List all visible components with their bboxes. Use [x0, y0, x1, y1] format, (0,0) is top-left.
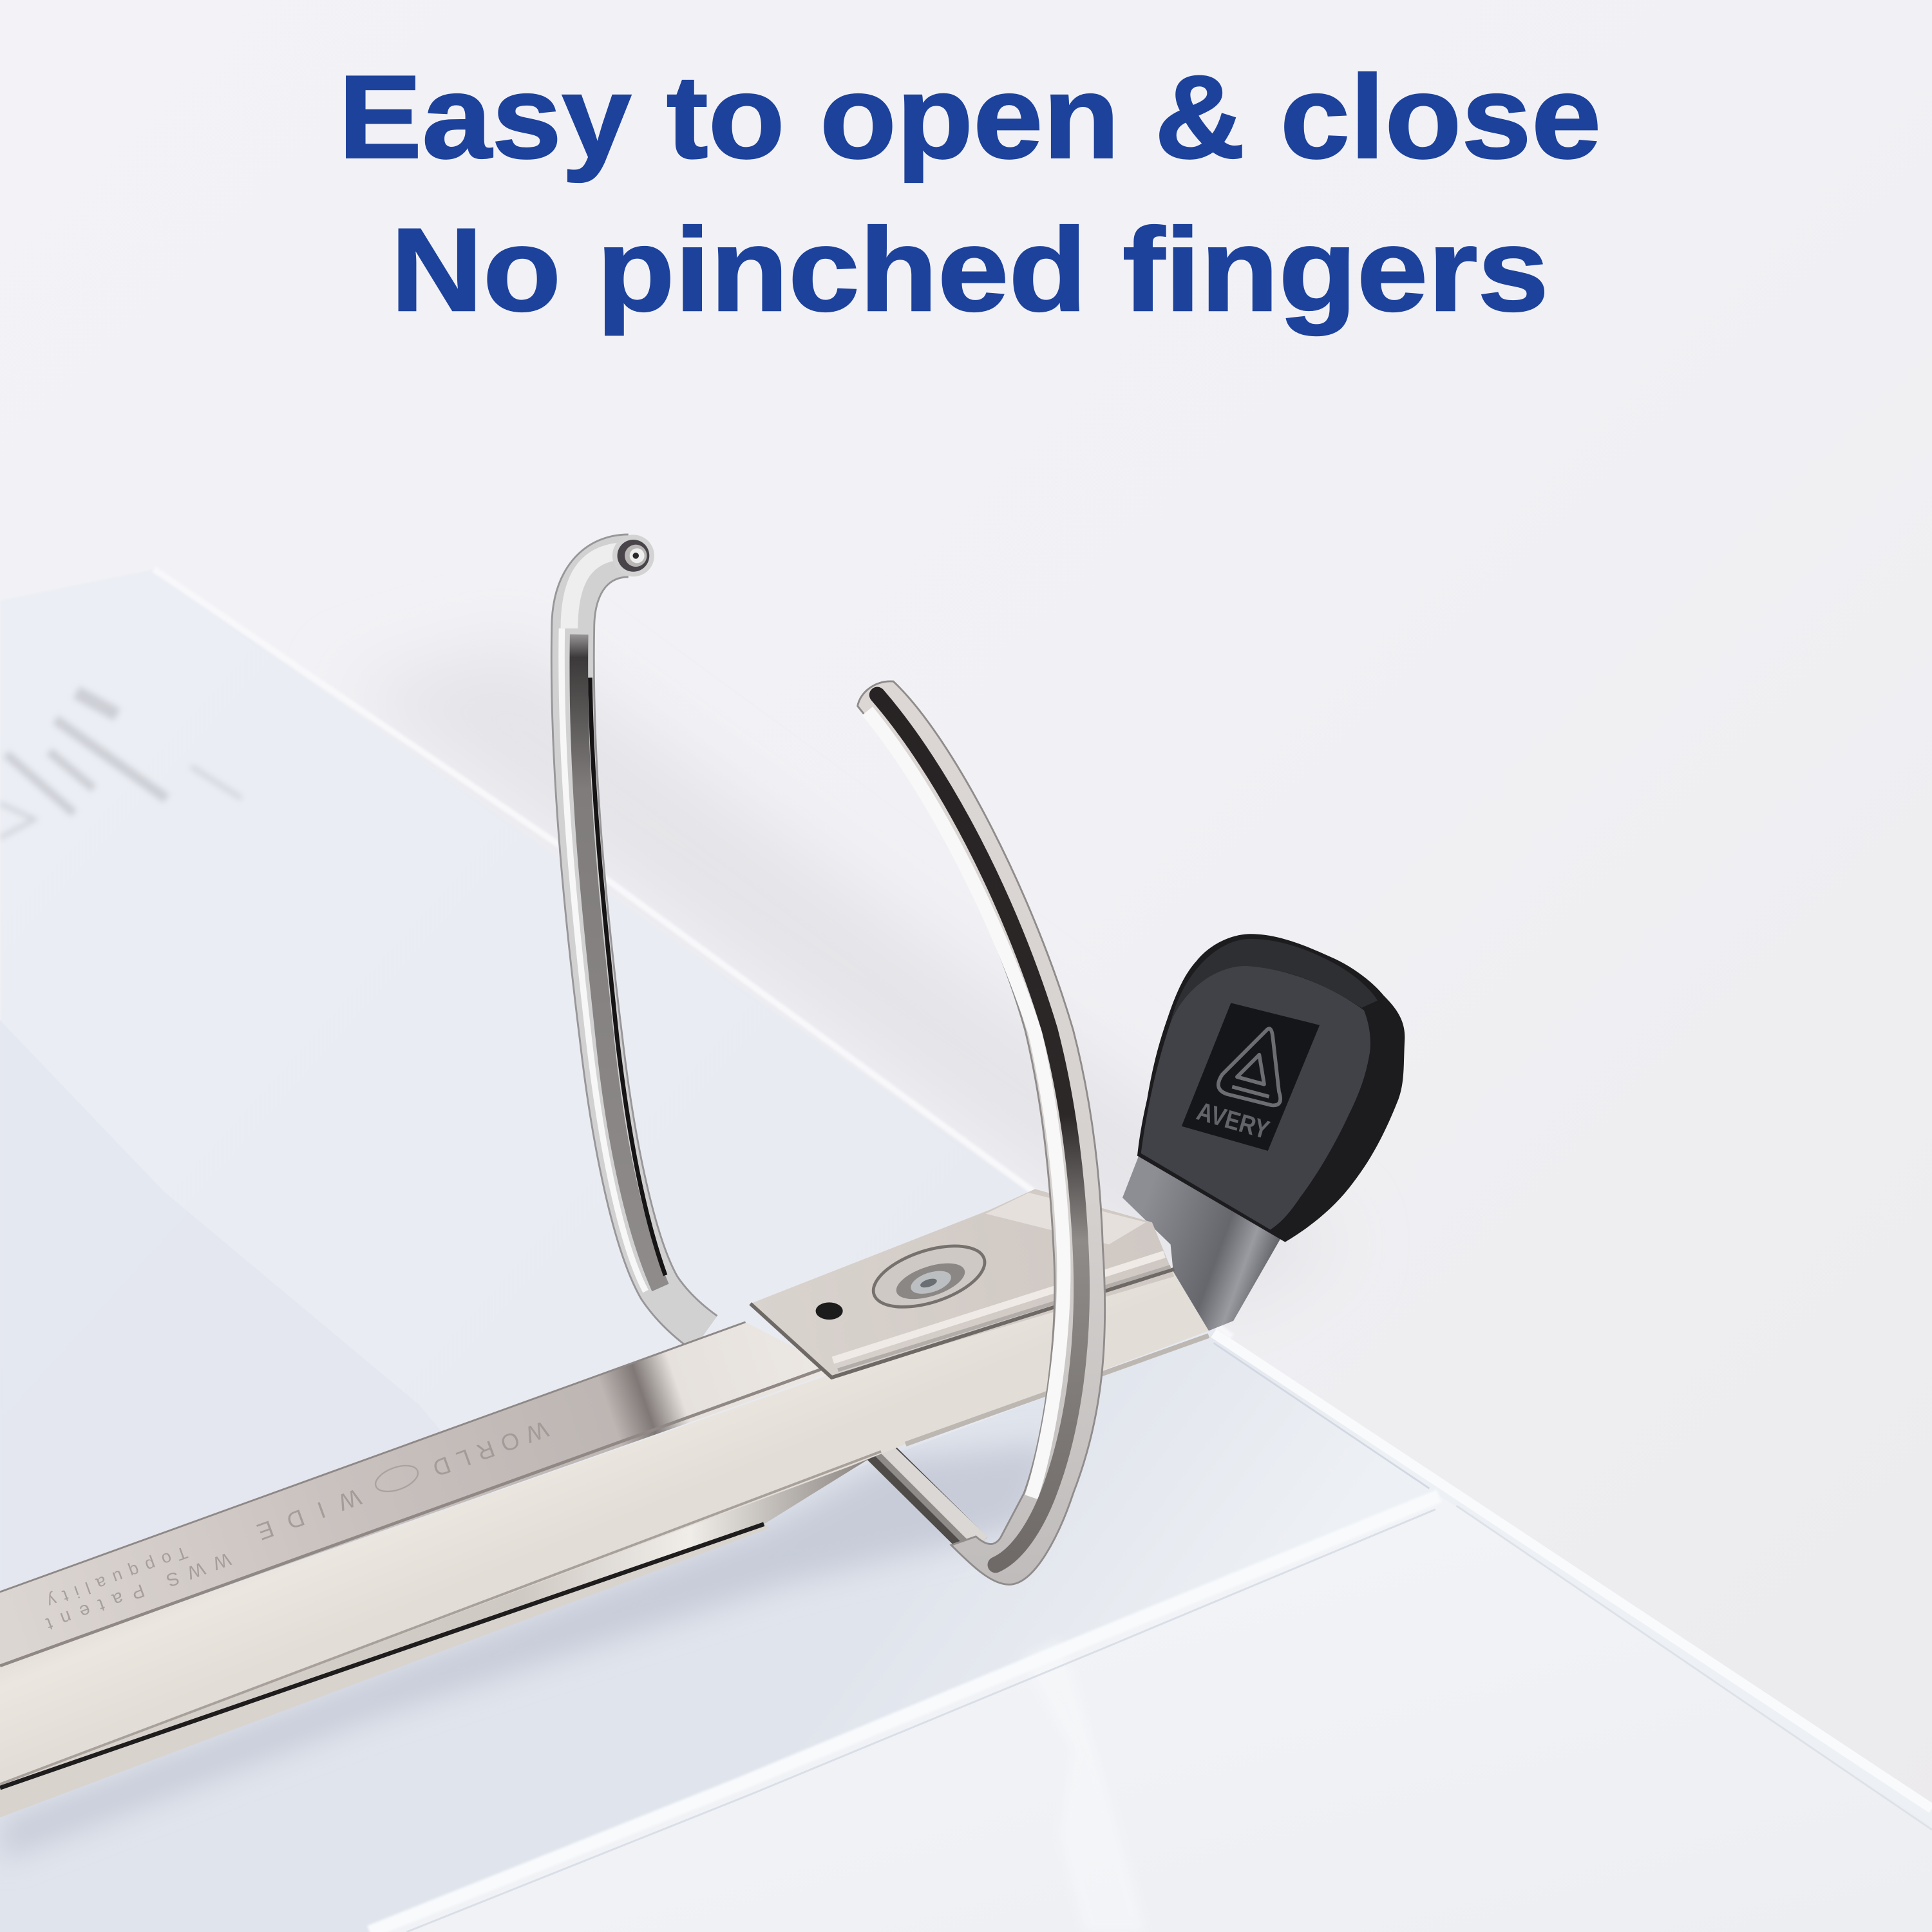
binder cover with clear pocket	[0, 1333, 1932, 1932]
title line 1: Easy to open & close	[338, 51, 1601, 183]
end plate	[750, 1189, 1174, 1378]
engraved text	[43, 1416, 552, 1634]
back ring	[562, 551, 705, 1333]
engraved text: WIDE	[254, 1484, 365, 1546]
engraved text: WORLD	[430, 1416, 552, 1482]
ring lower leg	[873, 1442, 982, 1548]
pocket area	[0, 1333, 1932, 1932]
engraved text: WWS Patent	[43, 1548, 234, 1634]
lower highlight band	[0, 1452, 881, 1788]
lever stem	[1122, 1153, 1282, 1331]
title line 2: No pinched fingers	[391, 204, 1549, 336]
rivet	[866, 1234, 992, 1319]
dark gap line	[0, 1524, 764, 1788]
top face	[0, 1322, 838, 1666]
metal mechanism bar	[0, 1189, 1209, 1817]
front face	[0, 1269, 1209, 1784]
engraved text: Topquality	[44, 1543, 190, 1611]
small hole	[816, 1302, 843, 1320]
shadow beneath metal mechanism	[0, 1442, 1059, 1861]
outer edge strip	[1214, 1333, 1932, 1809]
welded seam	[370, 1496, 1439, 1932]
paper sheet	[0, 569, 1232, 1932]
logo label	[1182, 1003, 1320, 1151]
paper shadow on surface	[345, 641, 1343, 1318]
back ring tip	[612, 535, 654, 576]
title	[338, 51, 1601, 336]
bottom rib	[0, 1524, 770, 1817]
front ring	[858, 681, 1105, 1584]
lower cover panel	[370, 1497, 1932, 1932]
faint printed marks on paper	[0, 692, 242, 838]
logo label: AVERY	[1193, 1097, 1273, 1145]
engraved logo	[372, 1461, 421, 1497]
black lever knob	[1137, 934, 1405, 1242]
